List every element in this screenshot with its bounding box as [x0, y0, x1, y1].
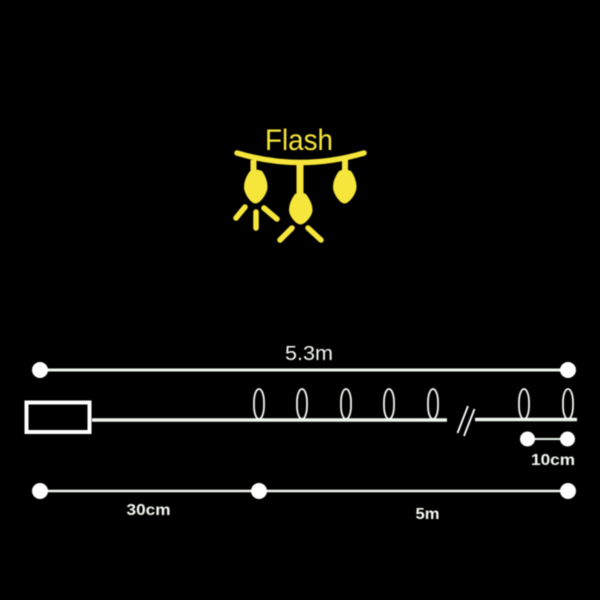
segment dimensions: 30cm and 5m	[32, 483, 576, 523]
icon: wire	[237, 153, 364, 162]
midpoint	[251, 483, 267, 499]
endpoint right	[560, 483, 576, 499]
icon: left bulb	[244, 160, 268, 204]
spacing line	[527, 438, 568, 440]
label: 5.3m: 5.3m	[285, 343, 333, 365]
endpoint right	[560, 362, 576, 378]
dimension line	[40, 368, 568, 372]
label: 30cm: 30cm	[126, 502, 170, 519]
heading: Flash: Flash	[265, 124, 333, 157]
endpoint left	[32, 362, 48, 378]
label: 10cm: 10cm	[531, 452, 575, 469]
break mark	[458, 406, 474, 436]
string wire	[92, 418, 577, 422]
icon: middle bulb rays	[280, 228, 321, 240]
label: 5m: 5m	[416, 506, 440, 523]
endpoint left	[520, 432, 535, 446]
icon: left bulb rays	[236, 207, 277, 228]
bulb spacing dimension: 10cm	[520, 432, 575, 469]
endpoint left	[32, 483, 48, 499]
battery box	[26, 402, 90, 432]
icon: middle bulb	[289, 163, 312, 224]
bulbs	[254, 389, 573, 419]
icon: right bulb	[333, 158, 356, 204]
icon: flash mode light string	[236, 124, 364, 240]
total length dimension: 5.3m	[32, 343, 576, 378]
dimension line	[40, 490, 568, 492]
diagram: battery box and light string	[26, 389, 577, 436]
endpoint right	[560, 432, 575, 446]
